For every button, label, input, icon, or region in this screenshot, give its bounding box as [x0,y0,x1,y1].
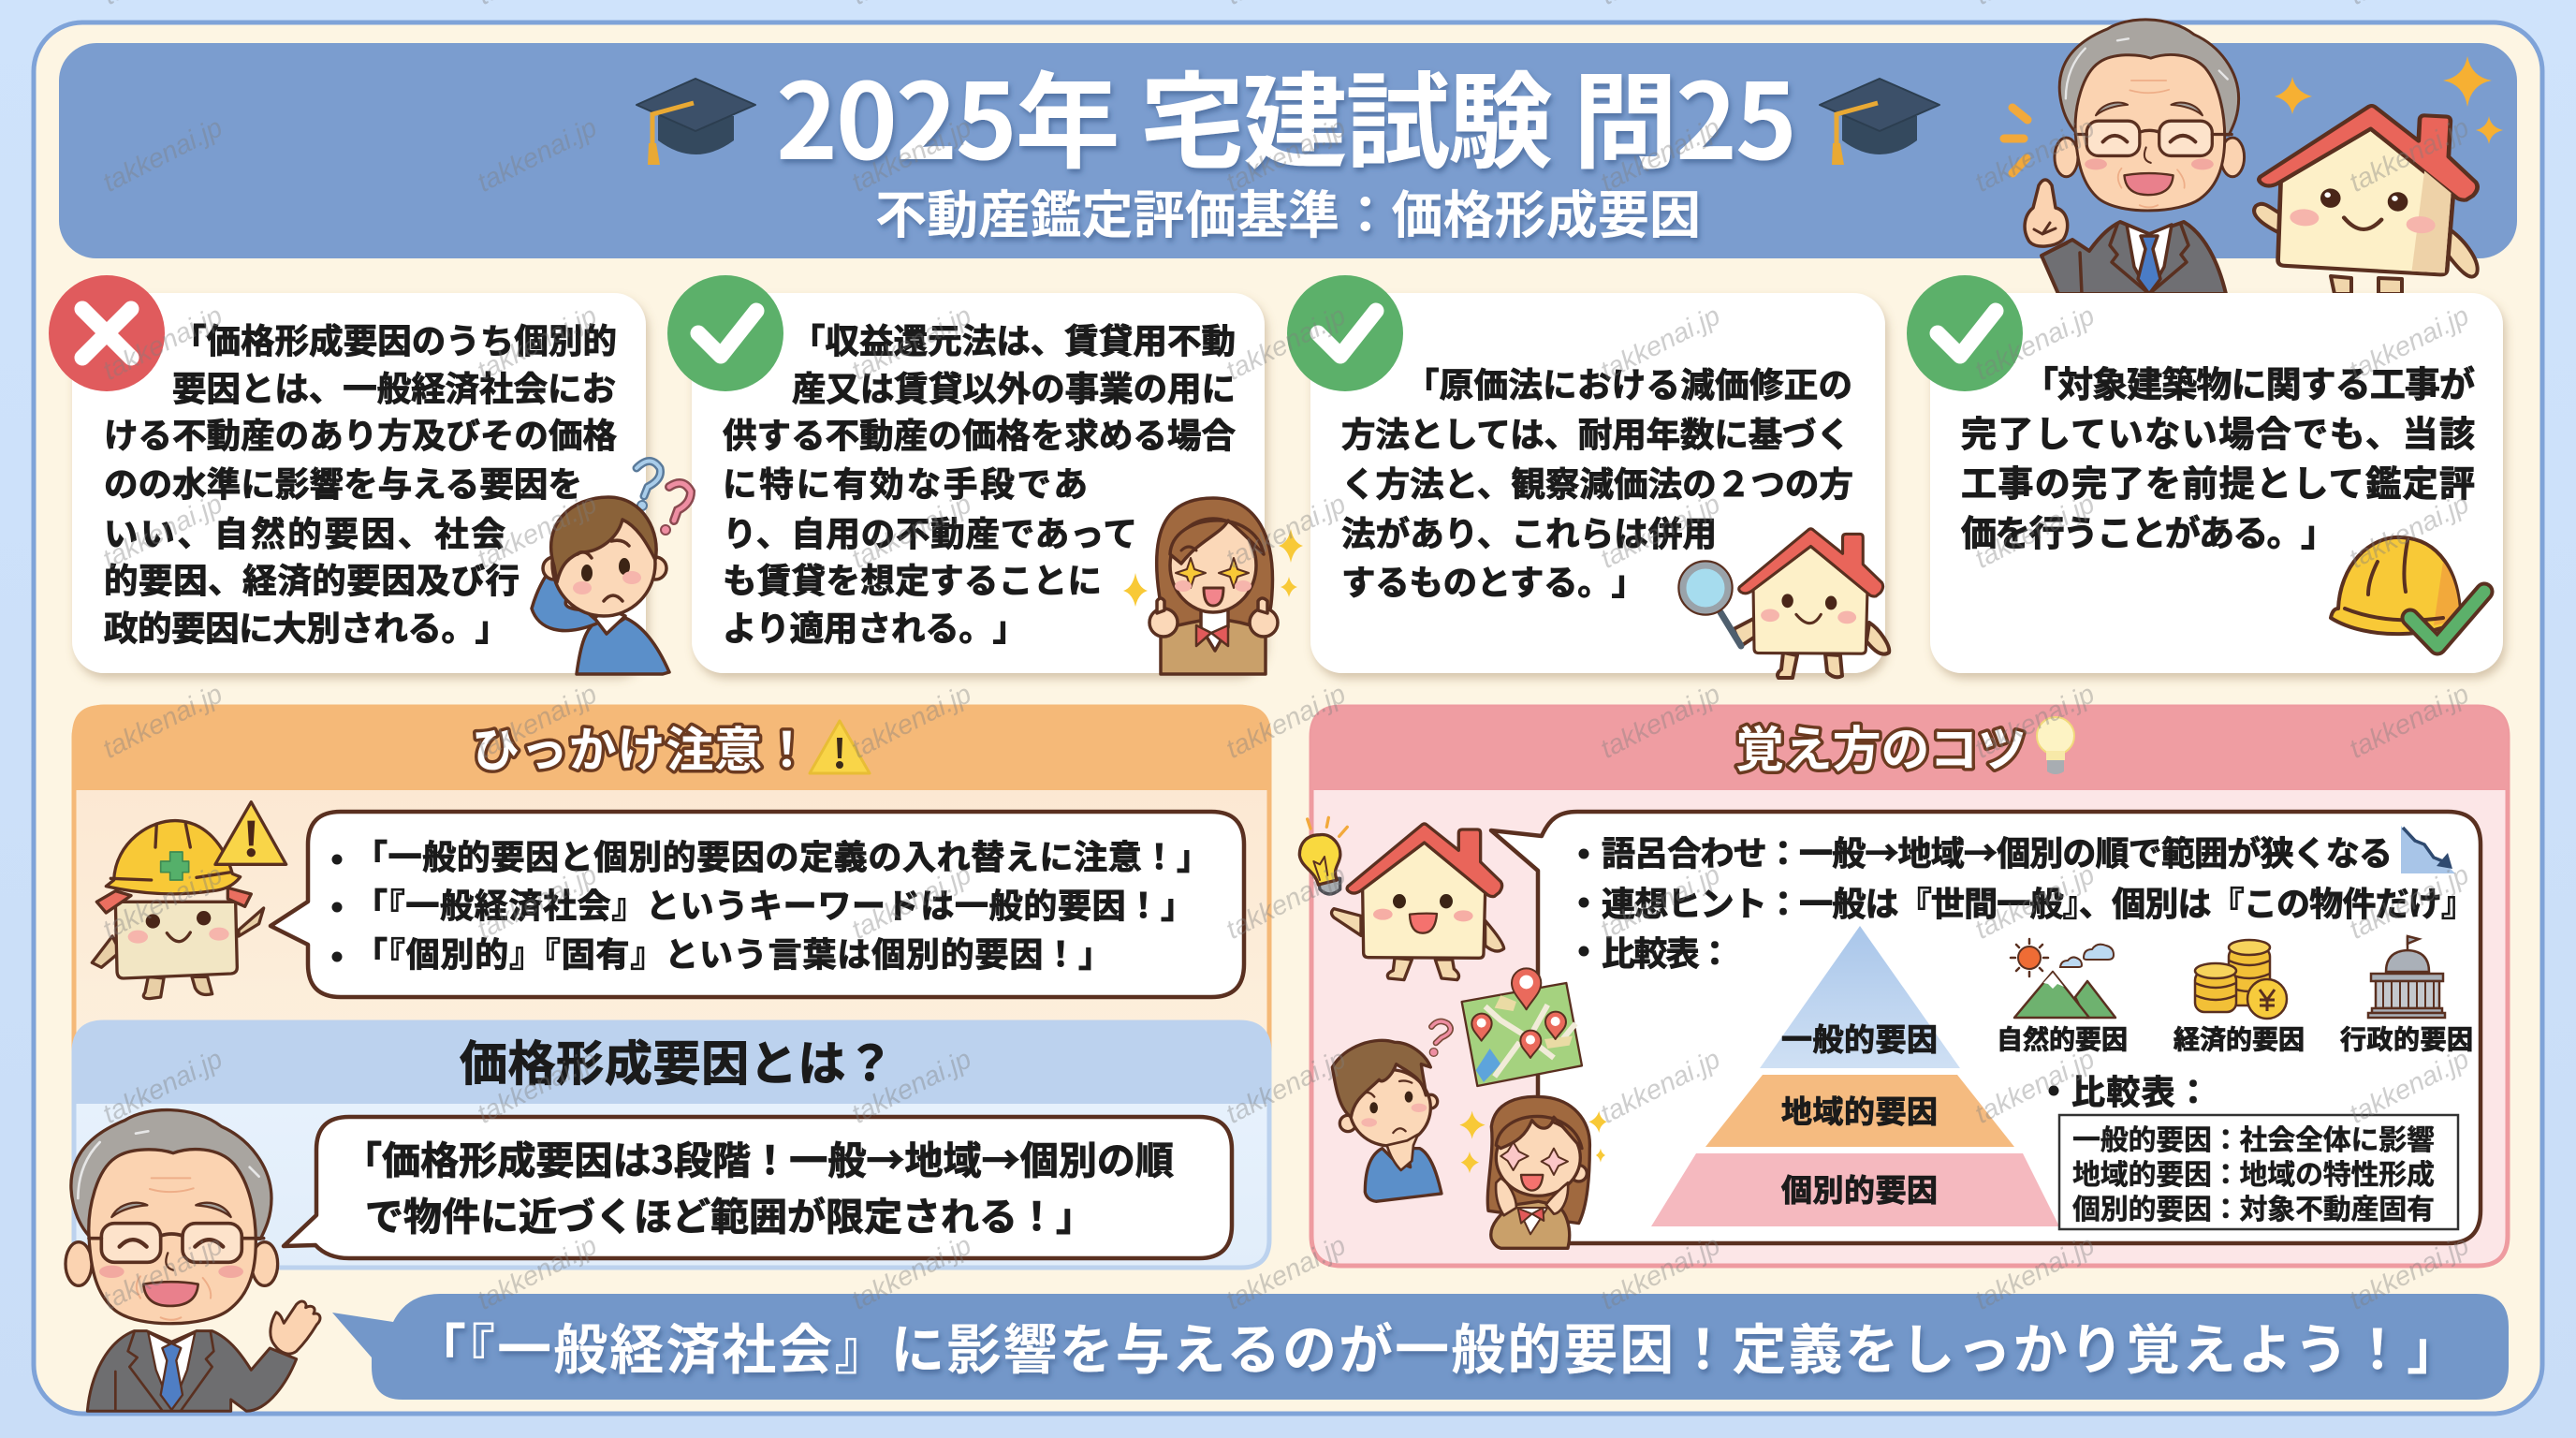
characters: tips side illustrations [1299,817,1607,1248]
watermark: takkenai.jp: takkenai.jp [98,679,227,765]
icon: coins [2195,940,2287,1019]
watermark: takkenai.jp: takkenai.jp [473,301,602,387]
watermark: takkenai.jp: takkenai.jp [1222,489,1351,575]
character: sparkling girl [1123,498,1303,674]
text block: statement 4: 完了していない場合でも、当該 [1961,405,2475,457]
text block: statement 1: のの水準に影響を与える要因を [104,457,582,506]
callout: closing banner [332,1294,2509,1400]
icon: map with pins [1462,968,1582,1086]
watermark: takkenai.jp: takkenai.jp [847,859,976,946]
watermark: takkenai.jp: takkenai.jp [1596,859,1725,946]
character: house waving with sparkles [2254,56,2503,294]
watermark: takkenai.jp: takkenai.jp [473,489,602,575]
icon: green check badge [1907,275,2023,391]
watermark: takkenai.jp: takkenai.jp [1222,1230,1351,1316]
character: house with hard hat [92,802,286,999]
speech bubble: tips [1491,812,2481,1243]
watermark: takkenai.jp: takkenai.jp [1970,112,2100,198]
text block: tips: 連想ヒント：一般は『世間一般』、個別は『この物件だけ』 [1602,877,2475,926]
watermark: takkenai.jp: takkenai.jp [847,112,976,198]
comparison table: 地域的要因：地域の特性形成 [2072,1152,2435,1193]
speech bubble: three stages: 「価格形成要因は3段階！一般→地域→個別の順 [344,1129,1174,1185]
icon: nature [2011,939,2115,1018]
text block: statement 4: 価を行うことがある。」 [1961,505,2336,556]
text block: statement 4: 工事の完了を前提として鑑定評 [1961,455,2475,506]
text block: tips: 語呂合わせ：一般→地域→個別の順で範囲が狭くなる [1602,827,2393,875]
comparison table: 比較表： [2071,1065,2210,1114]
chart: pyramid of factors: 個別的要因 [1781,1166,1938,1211]
character: teacher waving [66,1110,320,1411]
watermark: takkenai.jp: takkenai.jp [1970,1044,2100,1130]
watermark: takkenai.jp: takkenai.jp [98,301,227,387]
text block: statement 2: り、自用の不動産であって [723,506,1137,556]
watermark: takkenai.jp: takkenai.jp [2345,112,2474,198]
character: thinking boy [1332,1021,1451,1201]
icon: red cross badge [49,275,165,391]
icon labels: factor categories: 経済的要因 [2174,1020,2305,1057]
header band [59,38,2517,258]
watermark: takkenai.jp: takkenai.jp [2345,679,2474,765]
watermark: takkenai.jp: takkenai.jp [98,489,227,575]
watermark: takkenai.jp: takkenai.jp [847,301,976,387]
speech bubble: trap warning: 「『一般経済社会』というキーワードは一般的要因！」 [354,879,1194,928]
text block: statement 3: 「原価法における減価修正の [1405,358,1852,407]
watermark: takkenai.jp: takkenai.jp [1596,679,1725,765]
watermark: takkenai.jp: takkenai.jp [98,1230,227,1316]
text block: statement 1: 「価格形成要因のうち個別的 [172,314,617,363]
icon: sparkles [2275,56,2503,144]
speech bubble: three stages [284,1117,1232,1258]
speech bubble: three stages: で物件に近づくほど範囲が限定される！」 [365,1185,1094,1241]
icon: sparkles [1123,529,1303,607]
icon: green check badge [667,275,783,391]
watermark: takkenai.jp: takkenai.jp [1222,859,1351,946]
character: house with magnifying glass [1679,529,1889,678]
text block: statement 1 [104,314,617,651]
text block: tips: 比較表： [1602,927,1732,976]
comparison table [2048,1065,2458,1229]
text block: statement 1: 的要因、経済的要因及び行 [104,553,520,603]
text block: statement 2: に特に有効な手段であ [723,457,1088,506]
icon: sparkles [1459,1111,1607,1173]
text block: statement 2: 供する不動産の価格を求める場合 [723,408,1236,458]
text block: statement 2: 「収益還元法は、賃貸用不動 [791,314,1236,363]
watermark: takkenai.jp: takkenai.jp [1970,489,2100,575]
text block: statement 4 [1961,356,2475,556]
watermark: takkenai.jp: takkenai.jp [1596,489,1725,575]
watermark: takkenai.jp: takkenai.jp [98,112,227,198]
text block: statement 3: 方法としては、耐用年数に基づく [1341,407,1851,457]
watermark: takkenai.jp: takkenai.jp [98,859,227,946]
text block: statement 4: 「対象建築物に関する工事が [2023,356,2475,407]
comparison table: 一般的要因：社会全体に影響 [2072,1117,2435,1158]
heading: trap warning: ひっかけ注意！ [472,712,811,781]
watermark: takkenai.jp: takkenai.jp [2345,301,2474,387]
watermark: takkenai.jp: takkenai.jp [1222,301,1351,387]
icon: green check badge [1287,275,1403,391]
watermark: takkenai.jp: takkenai.jp [473,1230,602,1316]
watermark: takkenai.jp: takkenai.jp [847,1044,976,1130]
icon: graduation cap left [637,79,755,165]
panel: statement 3 (correct) [1287,275,1885,673]
speech bubble: trap warning: 「一般的要因と個別的要因の定義の入れ替えに注意！」 [354,830,1210,879]
watermark: takkenai.jp: takkenai.jp [847,489,976,575]
watermark: takkenai.jp: takkenai.jp [473,112,602,198]
character: happy house [1331,824,1504,980]
watermark: takkenai.jp: takkenai.jp [1596,112,1725,198]
callout: closing banner: 「『一般経済社会』に影響を与えるのが一般的要因！定義をしっかり覚えよう！」 [412,1306,2461,1385]
panel: trap warning [72,705,1271,1081]
panel: statement 2 (correct) [667,275,1265,673]
icon labels: factor categories: 自然的要因 [1997,1020,2128,1057]
text block: statement 2: も賃貸を想定することに [723,553,1102,603]
text block: statement 3: 法があり、これらは併用 [1341,506,1717,556]
chart: pyramid of factors: 一般的要因 [1781,1015,1938,1060]
watermark: takkenai.jp: takkenai.jp [98,1044,227,1130]
watermark: takkenai.jp: takkenai.jp [473,859,602,946]
text block: statement 2: 産又は賃貸以外の事業の用に [792,361,1236,411]
watermark: takkenai.jp: takkenai.jp [1970,301,2100,387]
subtitle: 不動産鑑定評価基準：価格形成要因 [875,173,1701,248]
chart: pyramid of factors: 地域的要因 [1781,1087,1938,1132]
speech bubble: trap warning [271,812,1244,997]
icon: warning triangle [810,721,870,773]
character: excited girl [1487,1096,1589,1248]
icon labels: factor categories [1997,1020,2473,1057]
watermark: takkenai.jp: takkenai.jp [2345,859,2474,946]
watermark: takkenai.jp: takkenai.jp [1596,301,1725,387]
watermark: takkenai.jp: takkenai.jp [1222,1044,1351,1130]
watermark: takkenai.jp: takkenai.jp [1222,112,1351,198]
watermark: takkenai.jp: takkenai.jp [1596,1044,1725,1130]
text block: statement 2 [723,314,1236,651]
text block: statement 3: するものとする。」 [1341,555,1646,605]
watermark: takkenai.jp: takkenai.jp [1596,1230,1725,1316]
text block: tips [1602,827,2475,976]
icon: light bulb [2037,717,2074,774]
watermark: takkenai.jp: takkenai.jp [473,1044,602,1130]
heading: what are price factors: 価格形成要因とは？ [460,1025,894,1094]
panel: what are price factors [74,1022,1269,1268]
chart: pyramid of factors [1651,926,2059,1226]
watermark: takkenai.jp: takkenai.jp [2345,1044,2474,1130]
watermark: takkenai.jp: takkenai.jp [2345,1230,2474,1316]
icon: graduation cap right [1820,79,1939,165]
text block: statement 1: ける不動産のあり方及びその価格 [104,408,617,458]
speech bubble: trap warning: 「『個別的』『固有』という言葉は個別的要因！」 [354,928,1112,976]
text block: statement 1: いい、自然的要因、社会 [104,506,505,556]
watermark: takkenai.jp: takkenai.jp [1222,679,1351,765]
text block: statement 2: より適用される。」 [723,601,1027,651]
character: teacher pointing [2004,20,2245,294]
text block: statement 3: く方法と、観察減価法の２つの方 [1341,457,1853,506]
text block: statement 3 [1341,358,1853,605]
watermark: takkenai.jp: takkenai.jp [1970,859,2100,946]
watermark: takkenai.jp: takkenai.jp [847,679,976,765]
text block: statement 1: 要因とは、一般経済社会にお [172,361,616,411]
watermark: takkenai.jp: takkenai.jp [2345,489,2474,575]
watermark: takkenai.jp: takkenai.jp [1970,679,2100,765]
icon: light bulb with rays [1299,817,1347,894]
watermark: takkenai.jp: takkenai.jp [847,1230,976,1316]
heading: memory tips: 覚え方のコツ [1735,711,2027,781]
comparison table: 個別的要因：対象不動産固有 [2072,1186,2435,1227]
text block: statement 1: 政的要因に大別される。」 [104,601,509,651]
icon: narrowing trend [2401,826,2455,873]
watermark: takkenai.jp: takkenai.jp [473,679,602,765]
character: confused boy with question marks [532,461,691,674]
icon: hard hat with check [2331,537,2484,646]
panel: statement 4 (correct) [1907,275,2503,673]
icon labels: factor categories: 行政的要因 [2340,1020,2473,1057]
watermark: takkenai.jp: takkenai.jp [1970,1230,2100,1316]
panel: statement 1 (incorrect) [49,275,646,673]
title: 2025年 宅建試験 問25 [776,38,1797,190]
icon: government building [2368,936,2445,1018]
